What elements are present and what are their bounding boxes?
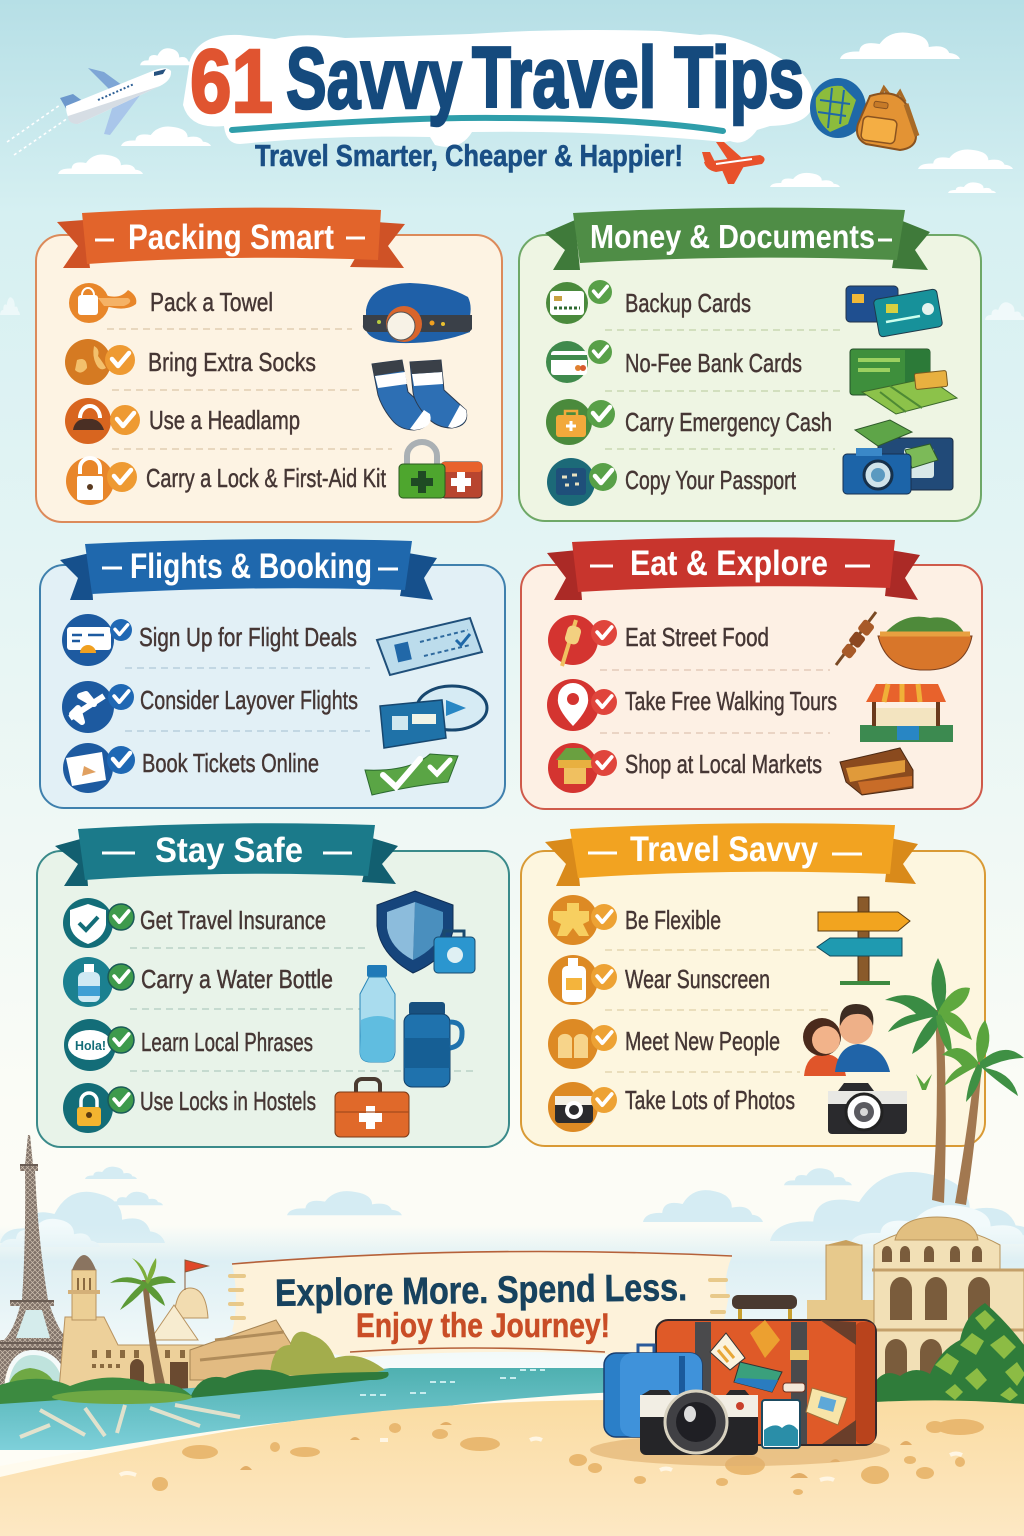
ribbon — [57, 208, 405, 268]
item: local phrases: Hola! — [75, 1038, 106, 1053]
title number: 61 — [190, 32, 273, 132]
illustration: check banner — [365, 754, 458, 795]
item: water bottle: Carry a Water Bottle — [141, 964, 333, 994]
ribbon: Flights & Booking — [130, 547, 372, 586]
orange suitcase — [656, 1295, 876, 1445]
illustration: med case — [335, 1079, 409, 1137]
item: layover flights: Consider Layover Flights — [140, 685, 358, 715]
ribbon — [545, 823, 918, 886]
item: towel: Pack a Towel — [150, 287, 273, 317]
panel: money and documents — [519, 208, 981, 521]
beach sand — [0, 1400, 1024, 1536]
panel box — [521, 565, 982, 809]
item: flexible — [548, 895, 721, 945]
panel box — [37, 851, 509, 1147]
illustration: shield — [377, 891, 475, 973]
illustration: palm trees — [885, 958, 1024, 1205]
illustration: bills and camera — [843, 420, 953, 494]
camera — [640, 1390, 758, 1455]
item: backup cards: Backup Cards — [625, 288, 751, 318]
panel: packing smart — [36, 208, 502, 522]
icon: flag — [185, 1260, 208, 1290]
item: street food: Eat Street Food — [625, 622, 769, 652]
item: layover flights — [62, 681, 358, 733]
illustration: luggage group — [590, 1295, 890, 1466]
illustration: cards — [846, 286, 943, 337]
illustration: skewer and bowl — [836, 612, 972, 670]
ribbon: Money & Documents — [590, 218, 875, 255]
panel box — [40, 565, 505, 808]
illustration: boarding pass and tag — [380, 686, 487, 748]
icon: small red plane — [702, 142, 765, 184]
item: new people — [548, 1019, 780, 1069]
item: new people: Meet New People — [625, 1026, 780, 1056]
item: photos: Take Lots of Photos — [625, 1085, 795, 1115]
item: socks — [65, 339, 316, 385]
illustration: right bushes — [875, 1303, 1024, 1404]
item: insurance — [63, 898, 326, 948]
item: headlamp: Use a Headlamp — [149, 405, 300, 435]
panel box — [36, 235, 502, 522]
ribbon — [55, 823, 398, 886]
illustration: tickets — [377, 618, 482, 675]
illustration: socks — [372, 360, 467, 430]
item: water bottle — [63, 957, 333, 1007]
item: local markets: Shop at Local Markets — [625, 749, 822, 779]
item: hostel locks — [63, 1083, 316, 1133]
item: hostel locks: Use Locks in Hostels — [140, 1086, 316, 1116]
clouds: scene — [0, 1167, 1024, 1370]
icon: airplane left — [7, 68, 171, 155]
ribbon: Travel Savvy — [630, 830, 818, 869]
illustration: money — [850, 349, 957, 414]
item: walking tours — [547, 679, 837, 731]
item: flexible: Be Flexible — [625, 905, 721, 935]
phone — [762, 1400, 800, 1448]
icon: globe — [810, 78, 866, 138]
panel: travel savvy — [521, 823, 985, 1146]
title — [183, 30, 813, 147]
ribbon — [545, 208, 930, 270]
item: emergency cash: Carry Emergency Cash — [625, 407, 832, 437]
illustration: lock and first aid kit — [399, 442, 482, 498]
illustration: left city buildings — [59, 1255, 307, 1390]
item: book tickets — [63, 743, 319, 793]
item: walking tours: Take Free Walking Tours — [625, 686, 837, 716]
panel: flights and booking — [40, 539, 505, 808]
ribbon: Packing Smart — [128, 218, 334, 257]
banner line one: Explore More. Spend Less. — [275, 1267, 687, 1315]
item: photos — [548, 1082, 795, 1132]
banner line two: Enjoy the Journey! — [356, 1307, 610, 1345]
panel box — [521, 851, 985, 1146]
illustration: headlamp — [363, 283, 472, 343]
item: headlamp — [65, 398, 300, 444]
sea — [0, 1368, 1024, 1450]
item: lock and kit — [66, 457, 387, 505]
illustration: brown box — [840, 748, 913, 795]
shadow — [590, 1434, 890, 1466]
illustration: right colosseum — [807, 1217, 1024, 1383]
icon: backpack — [857, 88, 917, 150]
item: emergency cash — [546, 399, 832, 445]
sand pebbles — [120, 1419, 984, 1495]
item: backup cards — [546, 280, 751, 324]
item: book tickets: Book Tickets Online — [142, 748, 319, 778]
item: flight deals: Sign Up for Flight Deals — [139, 622, 357, 652]
title underline — [232, 118, 723, 131]
beach foam — [0, 1392, 1024, 1478]
blue case — [604, 1345, 702, 1437]
panel: stay safe — [37, 823, 509, 1147]
ribbon: Eat & Explore — [630, 544, 828, 583]
illustration: market stall — [860, 684, 953, 742]
item: local phrases — [64, 1019, 313, 1071]
illustration: left palm — [110, 1258, 176, 1388]
title savvy: Savvy — [286, 31, 462, 127]
illustration: clear water bottle — [360, 965, 395, 1062]
title halo — [183, 30, 813, 147]
item: towel — [69, 283, 273, 323]
item: no-fee bank cards — [546, 340, 802, 383]
water splash — [20, 1405, 240, 1437]
subtitle: Travel Smarter, Cheaper & Happier! — [255, 138, 683, 173]
illustration: eiffel tower — [0, 1135, 92, 1387]
illustration: signpost — [817, 897, 910, 983]
item: lock and kit: Carry a Lock & First-Aid Kit — [146, 463, 387, 493]
panel: eat and explore — [521, 537, 982, 809]
illustration: camera — [828, 1083, 907, 1134]
item: no-fee bank cards: No-Fee Bank Cards — [625, 348, 802, 378]
item: flight deals — [62, 614, 357, 666]
trees left shore — [0, 1332, 389, 1404]
banner — [230, 1251, 732, 1362]
item: copy passport: Copy Your Passport — [625, 465, 797, 495]
ribbon — [60, 539, 437, 600]
sea highlights — [360, 1370, 545, 1395]
illustration: two people — [803, 1004, 890, 1076]
item: local markets — [548, 743, 822, 793]
item: socks: Bring Extra Socks — [148, 347, 316, 377]
item: copy passport — [547, 458, 797, 506]
ribbon — [547, 537, 920, 600]
clouds: header — [0, 32, 1024, 320]
panel box — [519, 235, 981, 521]
item: local phrases: Learn Local Phrases — [141, 1027, 313, 1057]
illustration: blue bottle — [404, 1002, 462, 1087]
ribbon: Stay Safe — [155, 831, 303, 870]
item: sunscreen — [548, 955, 770, 1005]
title travel tips: Travel Tips — [472, 30, 804, 126]
item: street food — [548, 615, 769, 666]
item: sunscreen: Wear Sunscreen — [625, 964, 770, 994]
item: insurance: Get Travel Insurance — [140, 905, 326, 935]
